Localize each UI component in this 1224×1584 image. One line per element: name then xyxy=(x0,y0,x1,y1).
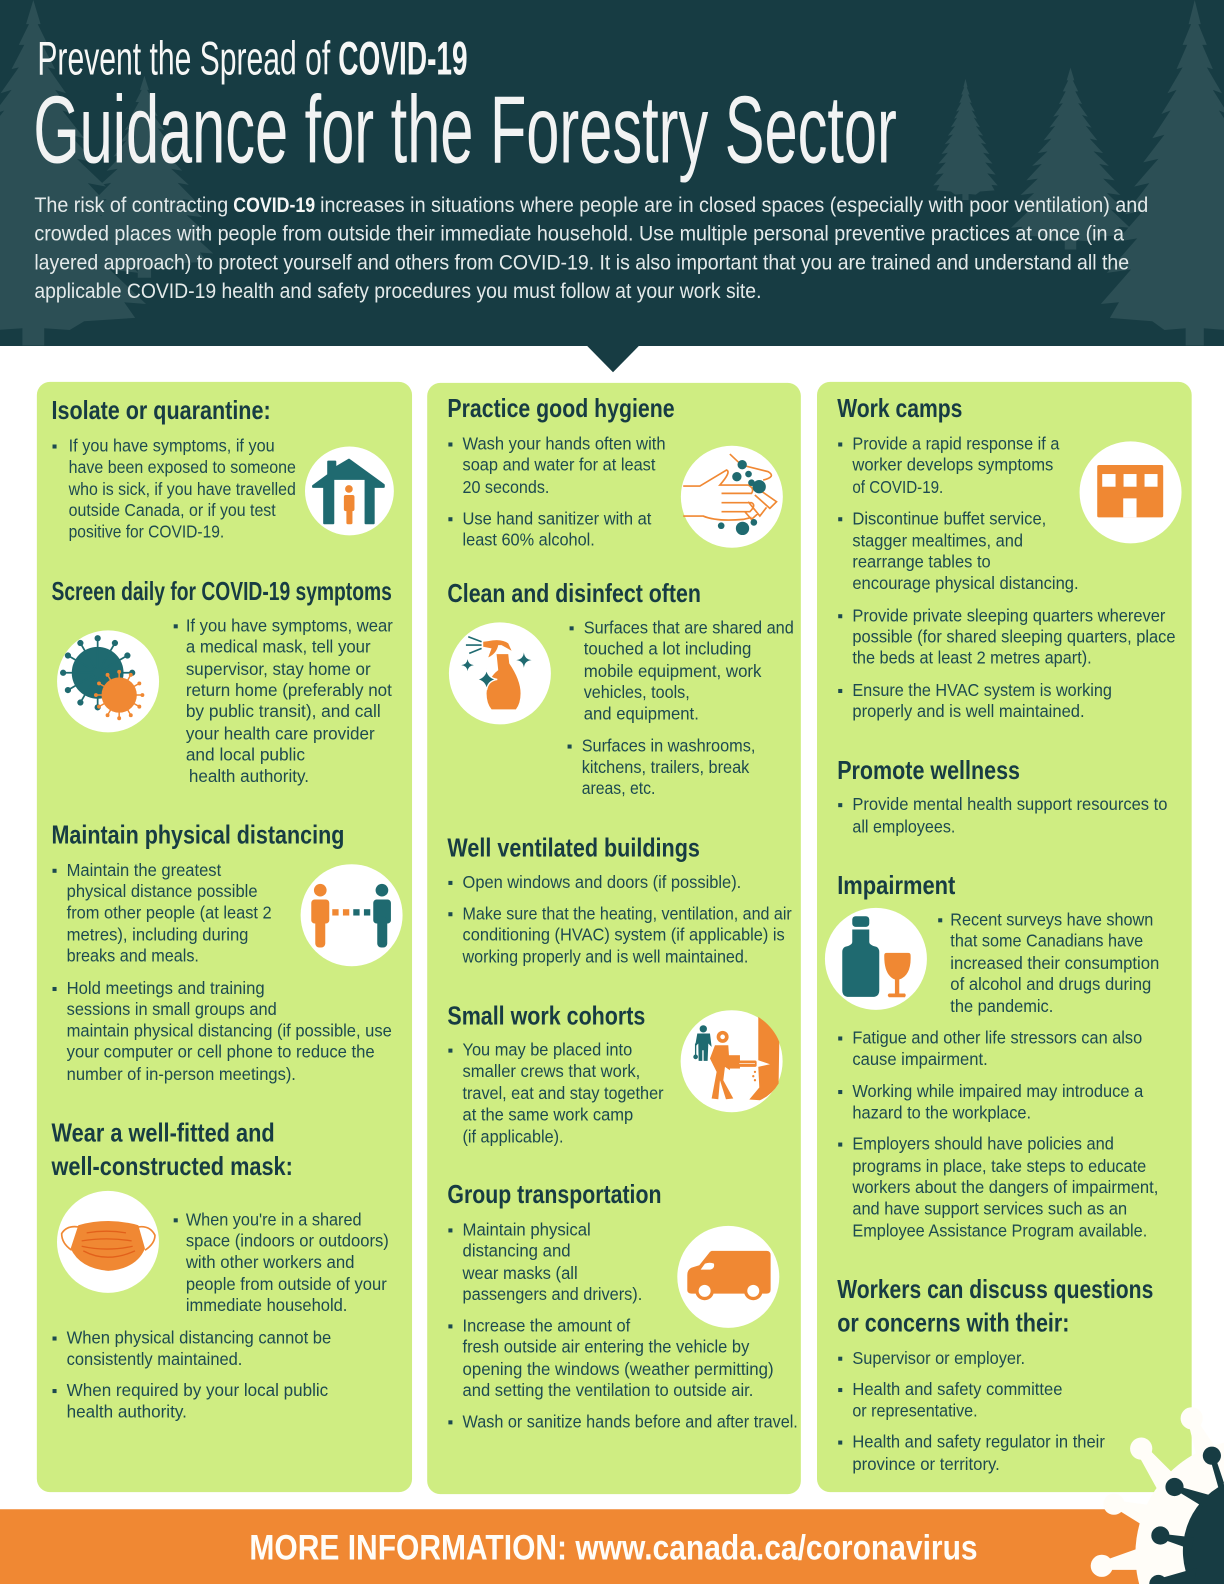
text block: impairment: and have support services such as an xyxy=(852,1198,1127,1218)
text block: hygiene: soap and water for at least xyxy=(463,455,656,475)
intro paragraph: increases in situations where people are in closed spaces (especially with poor ventilation) and xyxy=(320,194,1148,217)
text block: cohorts: smaller crews that work, xyxy=(463,1061,640,1081)
heading: wear a mask: Wear a well-fitted and xyxy=(52,1120,275,1148)
text block: transportation: and setting the ventilation to outside air. xyxy=(463,1380,753,1400)
text block: impairment xyxy=(838,909,1159,1240)
text block: mask: When you're in a shared xyxy=(186,1209,362,1229)
text block: screen daily: by public transit), and call xyxy=(186,701,381,721)
text block: work camps: of COVID-19. xyxy=(852,477,943,497)
panel background right xyxy=(817,382,1192,1492)
text block: impairment: of alcohol and drugs during xyxy=(950,974,1151,994)
icon: bottle and glass xyxy=(825,908,927,1010)
text block: impairment: increased their consumption xyxy=(950,953,1159,973)
text block: hygiene: least 60% alcohol. xyxy=(463,530,595,550)
heading: well ventilated buildings: Well ventilated buildings xyxy=(447,835,700,863)
text block: clean and disinfect: Surfaces that are shared and xyxy=(584,617,794,637)
text block: screen daily xyxy=(174,615,393,786)
text block: screen daily: a medical mask, tell your xyxy=(186,637,371,657)
text block: impairment: Fatigue and other life stressors can also xyxy=(852,1028,1142,1048)
text block: physical distancing: metres), including during xyxy=(67,924,248,945)
text block: physical distancing: maintain physical distancing (if possible, use xyxy=(67,1020,392,1040)
text block: mask: space (indoors or outdoors) xyxy=(186,1231,389,1251)
icon: forestry workers with chainsaw xyxy=(681,1010,783,1112)
text block: clean and disinfect: areas, etc. xyxy=(582,778,655,798)
text block: workers can discuss: Health and safety regulator in their xyxy=(852,1432,1105,1452)
text block: impairment: cause impairment. xyxy=(852,1049,988,1069)
text block: transportation: distancing and xyxy=(463,1241,571,1261)
text block: transportation: Increase the amount of xyxy=(463,1315,630,1335)
panel: right column xyxy=(817,382,1192,1492)
text block: physical distancing xyxy=(53,860,392,1084)
text block: mask: immediate household. xyxy=(186,1295,347,1315)
text block: work camps: Provide a rapid response if a xyxy=(852,434,1060,454)
icon: face mask xyxy=(57,1191,159,1293)
text block: isolate: who is sick, if you have travelled xyxy=(68,479,296,499)
panel background middle xyxy=(427,383,801,1494)
text block: clean and disinfect: Surfaces in washrooms, xyxy=(582,736,755,756)
heading: workers can discuss: or concerns with their: xyxy=(837,1309,1069,1337)
text block: mask: When required by your local public xyxy=(67,1380,328,1400)
text block: work camps: rearrange tables to xyxy=(852,552,991,572)
text block: work camps: possible (for shared sleeping quarters, place xyxy=(852,626,1176,646)
title: prevent the spread: Prevent the Spread of xyxy=(37,33,331,86)
text block: impairment: Employers should have policies and xyxy=(852,1134,1114,1154)
text block: transportation: fresh outside air entering the vehicle by xyxy=(463,1337,750,1357)
intro paragraph xyxy=(34,194,1148,303)
text block: ventilation xyxy=(448,872,792,967)
text block: clean and disinfect: kitchens, trailers, break xyxy=(582,757,749,777)
text block: transportation: wear masks (all xyxy=(462,1263,578,1283)
heading: impairment: Impairment xyxy=(837,872,956,900)
footer text: MORE INFORMATION: www.canada.ca/coronavirus xyxy=(249,1529,978,1568)
intro paragraph: applicable COVID-19 health and safety procedures you must follow at your work site. xyxy=(34,280,761,303)
text block: ventilation: working properly and is well maintained. xyxy=(462,947,748,967)
text block: mask: When physical distancing cannot be xyxy=(67,1328,331,1348)
text block: isolate: If you have symptoms, if you xyxy=(69,436,275,456)
text block: impairment: the pandemic. xyxy=(950,996,1053,1016)
text block: work camps: Discontinue buffet service, xyxy=(852,508,1046,528)
heading: clean and disinfect: Clean and disinfect often xyxy=(447,580,701,608)
text block: ventilation: Open windows and doors (if possible). xyxy=(463,872,741,892)
text block: screen daily: return home (preferably not xyxy=(186,680,392,700)
text block: wellness: all employees. xyxy=(852,816,955,836)
text block: hygiene: Use hand sanitizer with at xyxy=(463,508,651,528)
heading: workers can discuss xyxy=(837,1276,1153,1337)
text block: workers can discuss: province or territory. xyxy=(852,1454,1000,1474)
text block: work camps: stagger mealtimes, and xyxy=(852,531,1023,551)
text block: cohorts: (if applicable). xyxy=(463,1127,564,1147)
text block: ventilation: Make sure that the heating, ventilation, and air xyxy=(463,903,792,923)
text block: physical distancing: breaks and meals. xyxy=(67,946,199,966)
text block: work camps: properly and is well maintained. xyxy=(852,701,1085,721)
text block: isolate xyxy=(53,436,296,541)
intro paragraph: layered approach) to protect yourself and others from COVID-19. It is also important that you are trained and understand all the xyxy=(34,252,1129,275)
text block: transportation: opening the windows (weather permitting) xyxy=(463,1359,774,1379)
heading: promote wellness: Promote wellness xyxy=(837,757,1020,785)
heading: wear a mask xyxy=(51,1120,293,1181)
icon: building xyxy=(1080,441,1182,543)
text block: screen daily: health authority. xyxy=(189,766,309,786)
heading: isolate or quarantine: Isolate or quarantine: xyxy=(52,397,271,425)
header banner xyxy=(0,0,1224,372)
text block: work camps: the beds at least 2 metres apart). xyxy=(852,648,1092,668)
text block: physical distancing: from other people (at least 2 xyxy=(67,902,272,922)
text block: hygiene: Wash your hands often with xyxy=(463,434,666,454)
text block: physical distancing: Hold meetings and training xyxy=(67,978,265,998)
icon: virus particles xyxy=(57,630,159,732)
text block: clean and disinfect: vehicles, tools, xyxy=(584,682,690,702)
heading: screen daily: Screen daily for COVID-19 symptoms xyxy=(52,578,392,606)
panel: left column xyxy=(37,382,412,1492)
text block: screen daily: your health care provider xyxy=(186,723,375,743)
text block: screen daily: and local public xyxy=(186,745,305,765)
text block: screen daily: supervisor, stay home or xyxy=(186,659,371,679)
text block: mask: people from outside of your xyxy=(186,1274,387,1294)
text block: impairment: programs in place, take steps to educate xyxy=(852,1156,1146,1176)
text block: impairment: Working while impaired may introduce a xyxy=(852,1081,1143,1101)
intro paragraph: COVID-19 xyxy=(233,194,315,217)
icon: van xyxy=(677,1226,779,1328)
text block: transportation xyxy=(448,1219,798,1431)
text block: mask xyxy=(53,1209,389,1421)
title: prevent the spread: COVID-19 xyxy=(338,33,468,86)
text block: clean and disinfect: touched a lot including xyxy=(584,639,751,659)
text block: hygiene xyxy=(448,434,666,550)
icon: spray bottle xyxy=(449,622,551,724)
intro paragraph: crowded places with people from outside their immediate household. Use multiple personal preventive practices at once (in a xyxy=(34,222,1124,245)
text block: workers can discuss xyxy=(838,1348,1105,1474)
icon: washing hands xyxy=(681,446,783,548)
text block: hygiene: 20 seconds. xyxy=(463,477,549,497)
heading: practice good hygiene: Practice good hygiene xyxy=(447,395,675,423)
text block: clean and disinfect xyxy=(568,617,794,798)
text block: isolate: positive for COVID-19. xyxy=(69,521,224,541)
text block: ventilation: conditioning (HVAC) system (if applicable) is xyxy=(463,924,785,945)
text block: cohorts xyxy=(448,1040,664,1147)
text block: cohorts: at the same work camp xyxy=(463,1104,633,1124)
heading: work camps: Work camps xyxy=(837,395,962,423)
text block: impairment: that some Canadians have xyxy=(950,931,1143,951)
text block: workers can discuss: Health and safety committee xyxy=(852,1379,1063,1399)
icon: person in house xyxy=(305,447,394,535)
text block: wellness xyxy=(838,794,1168,836)
heading: workers can discuss: Workers can discuss questions xyxy=(837,1276,1153,1304)
text block: isolate: have been exposed to someone xyxy=(69,457,296,477)
text block: transportation: passengers and drivers). xyxy=(463,1284,642,1304)
text block: impairment: Recent surveys have shown xyxy=(950,909,1153,929)
text block: clean and disinfect: and equipment. xyxy=(584,703,699,723)
footer banner xyxy=(0,1509,1224,1584)
text block: physical distancing: number of in-person meetings). xyxy=(67,1064,296,1084)
text block: transportation: Maintain physical xyxy=(463,1219,591,1239)
text block: work camps: Ensure the HVAC system is working xyxy=(852,680,1112,700)
text block: impairment: Employee Assistance Program available. xyxy=(852,1220,1147,1240)
text block: workers can discuss: Supervisor or employer. xyxy=(852,1348,1025,1368)
text block: screen daily: If you have symptoms, wear xyxy=(186,615,393,635)
text block: transportation: Wash or sanitize hands before and after travel. xyxy=(463,1411,798,1431)
text block: work camps xyxy=(838,434,1176,721)
text block: workers can discuss: or representative. xyxy=(852,1400,978,1420)
text block: physical distancing: Maintain the greatest xyxy=(67,860,221,880)
text block: work camps: worker develops symptoms xyxy=(851,455,1053,475)
heading: small work cohorts: Small work cohorts xyxy=(447,1002,645,1030)
text block: impairment: workers about the dangers of impairment, xyxy=(851,1177,1158,1197)
text block: physical distancing: your computer or cell phone to reduce the xyxy=(67,1042,375,1062)
heading: group transportation: Group transportation xyxy=(447,1181,661,1209)
text block: work camps: encourage physical distancing. xyxy=(852,573,1079,593)
icon: corner virus xyxy=(1091,1407,1224,1584)
text block: mask: with other workers and xyxy=(185,1252,354,1272)
text block: physical distancing: physical distance possible xyxy=(67,881,258,901)
text block: cohorts: travel, eat and stay together xyxy=(463,1083,664,1103)
text block: cohorts: You may be placed into xyxy=(463,1040,632,1060)
text block: clean and disinfect: mobile equipment, work xyxy=(584,661,762,681)
panel background left xyxy=(37,382,412,1492)
text block: mask: consistently maintained. xyxy=(67,1349,242,1369)
text block: physical distancing: sessions in small groups and xyxy=(67,999,277,1019)
heading: wear a mask: well-constructed mask: xyxy=(51,1153,293,1181)
panel: middle column xyxy=(427,383,801,1494)
text block: impairment: hazard to the workplace. xyxy=(852,1102,1031,1122)
text block: isolate: outside Canada, or if you test xyxy=(69,500,276,520)
heading: maintain physical distancing: Maintain physical distancing xyxy=(52,822,344,850)
text block: work camps: Provide private sleeping quarters wherever xyxy=(852,605,1166,625)
intro paragraph: The risk of contracting xyxy=(34,194,228,217)
icon: two people distancing xyxy=(301,864,403,966)
text block: wellness: Provide mental health support resources to xyxy=(852,794,1168,814)
text block: mask: health authority. xyxy=(67,1401,187,1421)
